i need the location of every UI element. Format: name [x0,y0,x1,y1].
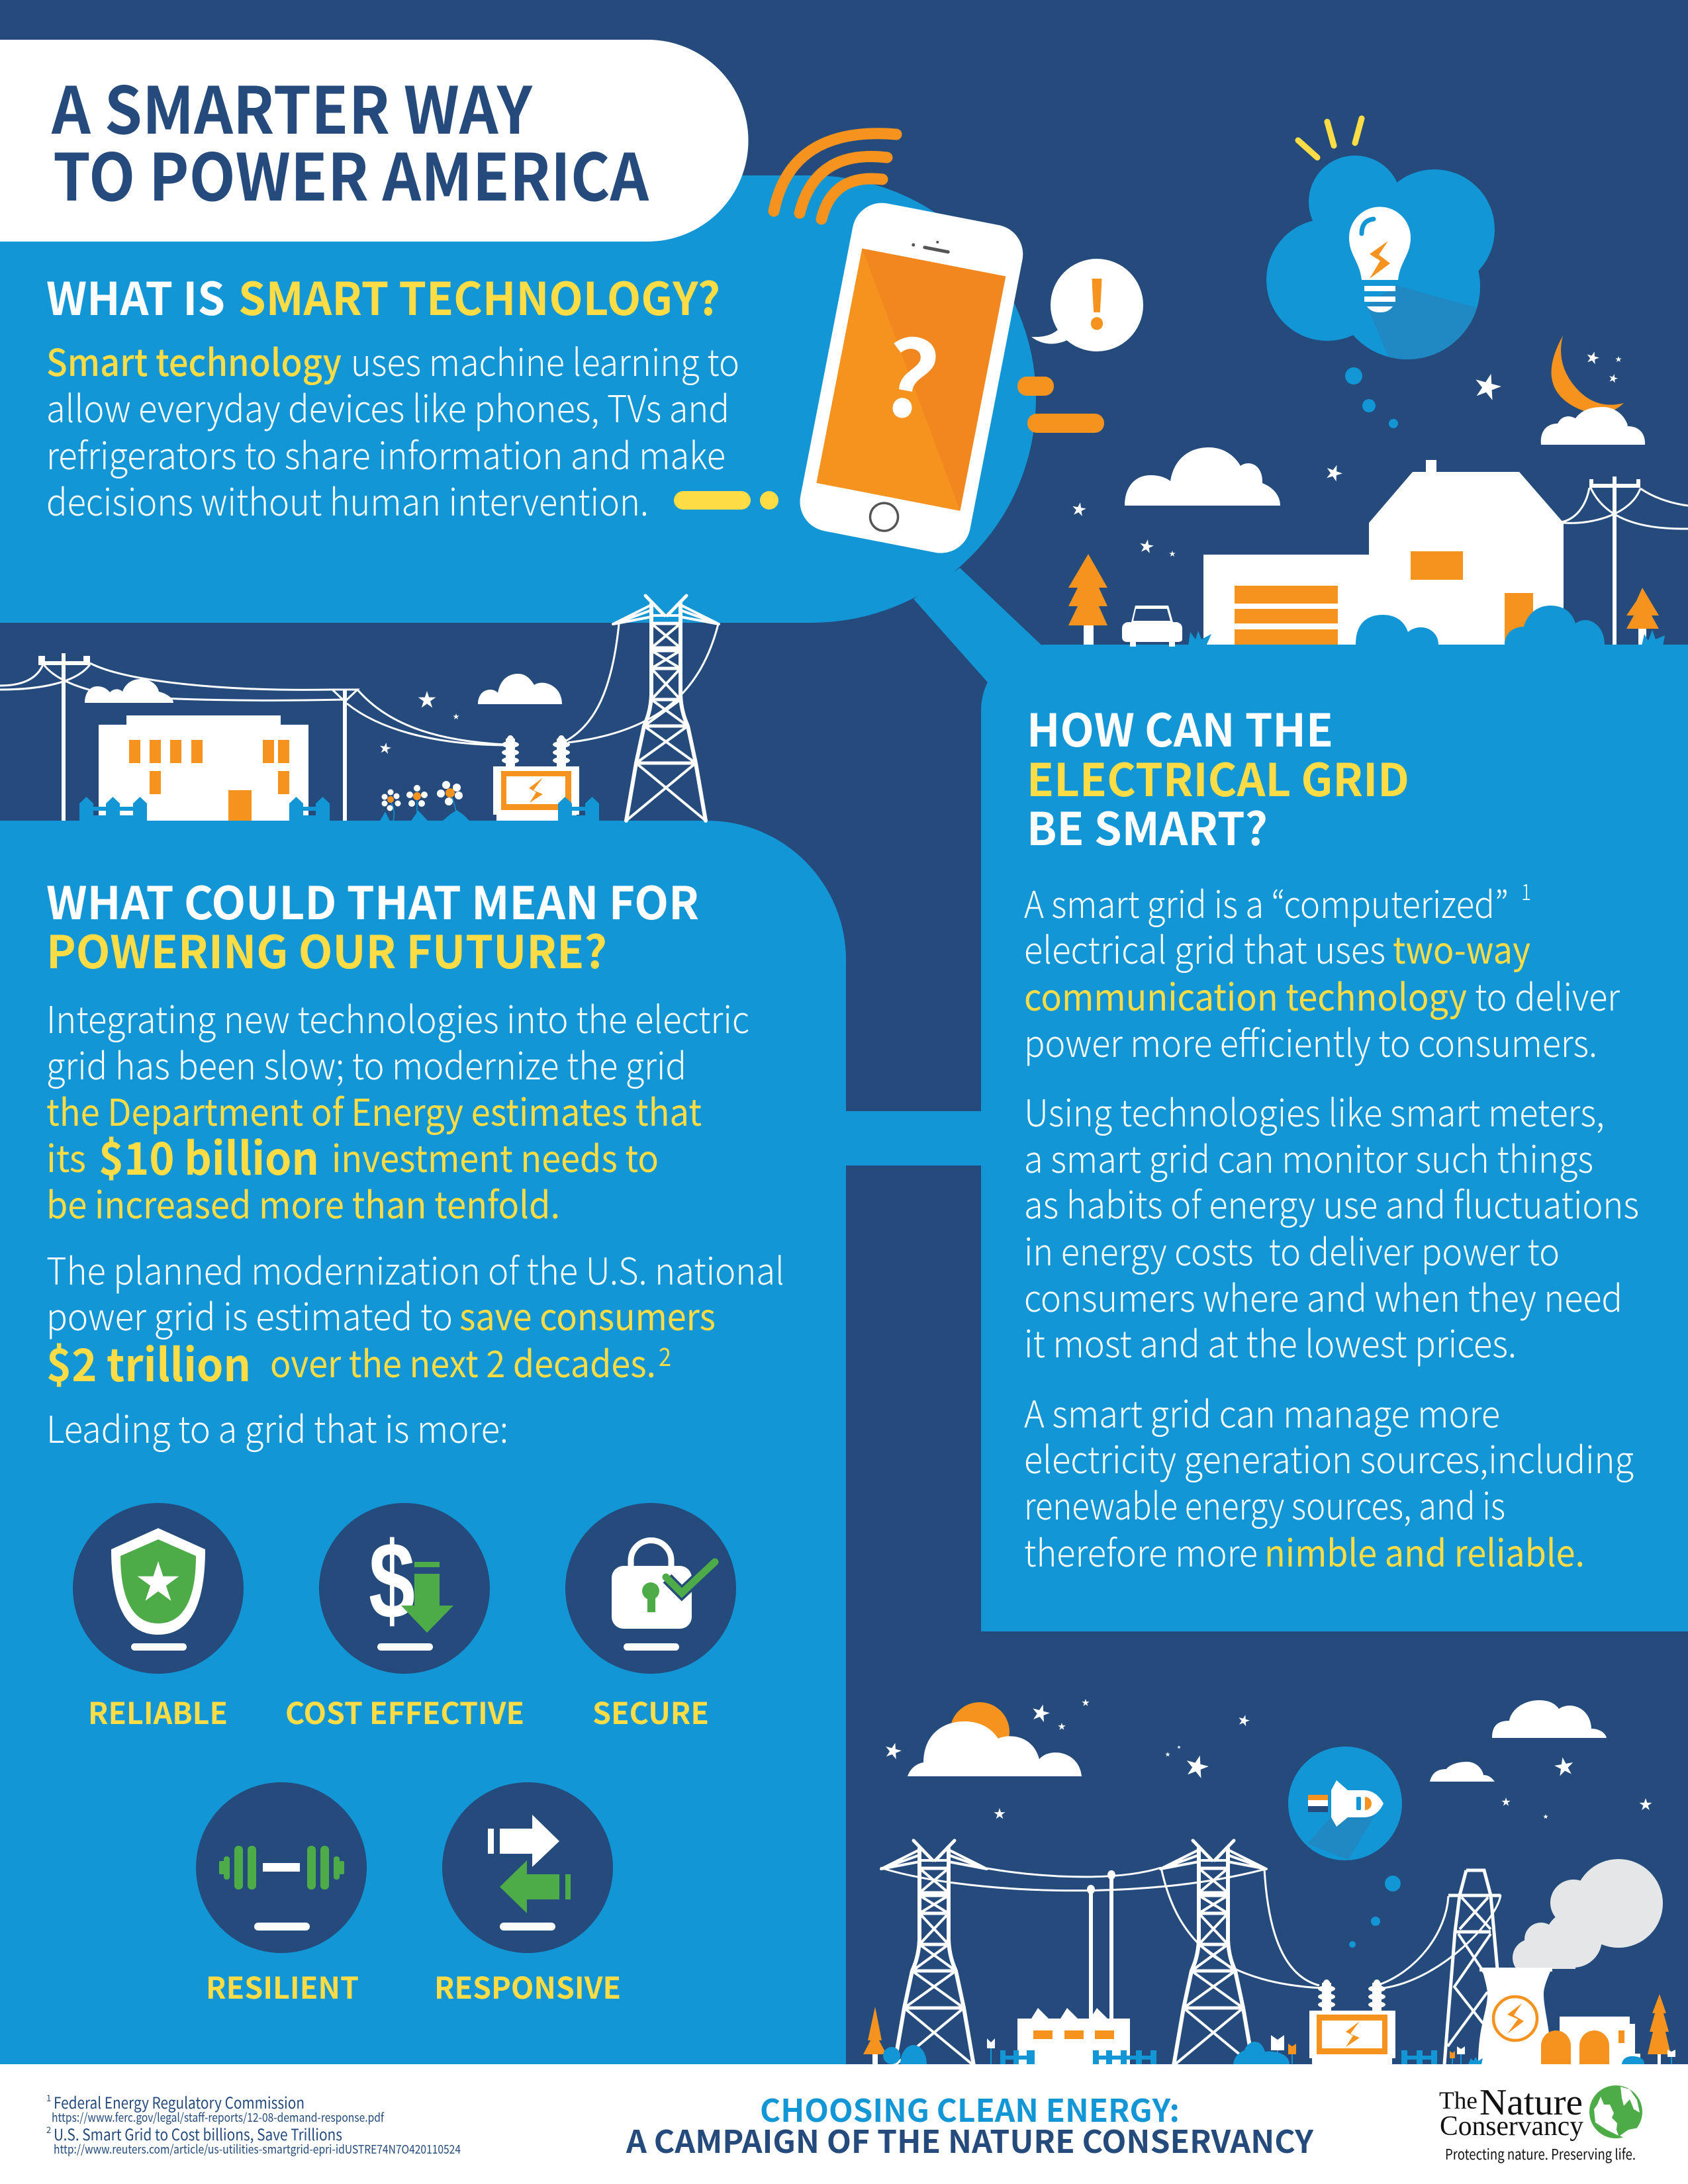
text block: monitoring: as habits of energy use and fluctuations [1024,1176,1639,1230]
smoke [1513,1859,1663,1976]
text block: smart technology definition: refrigerators to share information and make [46,427,726,480]
icon: exclamation speech bubble: ! [1084,252,1109,348]
tulips [987,2035,1675,2064]
text block: modernizing the grid: the Department of Energy estimates that [46,1083,702,1137]
text block: leading to: Leading to a grid that is more: [46,1400,508,1454]
text block: smart technology definition: uses machine learning to [351,334,739,387]
heading: what could that mean [46,867,699,981]
heading: what could that mean: POWERING OUR FUTURE? [46,916,607,981]
text block: nimble and reliable [1024,1385,1634,1578]
text block: nimble and reliable: electricity generation sources,including [1024,1431,1634,1484]
icon: idea cloud [1266,156,1496,371]
heading: how can the grid be smart [1027,694,1409,858]
cloud with sun [908,1721,1082,1776]
title: A SMARTER WAY [51,59,533,153]
cloud small [1430,1762,1495,1782]
icon group: resilient [196,1782,367,2007]
text block: consumer savings: 2 [659,1337,671,1373]
text block: monitoring [1024,1084,1639,1369]
text block: monitoring: Using technologies like smart meters, [1024,1084,1605,1138]
campaign tagline: A CAMPAIGN OF THE NATURE CONSERVANCY [626,2116,1314,2162]
text block: smart grid definition: 1 [1521,874,1531,907]
cloud: under moon [1541,407,1645,445]
title pill [0,40,748,242]
campaign tagline: CHOOSING CLEAN ENERGY: [760,2085,1180,2131]
scene: neighbourhood and transmission tower [0,596,719,821]
stars [883,1699,1652,1819]
text block: smart technology definition [46,334,739,527]
text block: modernizing the grid: grid has been slow; to modernize the grid [46,1037,686,1091]
connector: left panel to right panel [841,1111,986,1165]
text block: consumer savings: power grid is estimated to [46,1288,453,1342]
text block: smart grid definition: A smart grid is a “computerized” [1024,876,1509,929]
icon: smartphone: ? [870,293,952,451]
fences [1000,2050,1437,2064]
car [1122,606,1182,647]
cloud [85,679,173,703]
text block: consumer savings [46,1242,784,1394]
panel: what could that mean background [0,821,846,2064]
footnotes: 1 [46,2091,51,2104]
text block: smart grid definition: to deliver [1475,968,1620,1022]
logo: The Nature Conservancy: Conservancy [1440,2111,1583,2142]
utility pole left [38,653,90,821]
heading: what could that mean: WHAT COULD THAT MEAN FOR [46,867,699,933]
house [1203,460,1564,645]
footnotes: U.S. Smart Grid to Cost billions, Save Trillions [54,2122,342,2145]
title: TO POWER AMERICA [53,126,649,220]
cooling tower [1478,1968,1552,2064]
icon: sun [950,1702,1009,1762]
title [51,59,649,220]
heading: how can the grid be smart: BE SMART? [1027,793,1268,858]
icon group: cost effective: $ [369,1520,415,1641]
text block: smart technology definition: decisions without human intervention. [46,473,649,527]
heading: how can the grid be smart: ELECTRICAL GRID [1027,744,1409,809]
small tower [1444,1870,1501,2064]
trees [863,1994,1671,2064]
heading: how can the grid be smart: HOW CAN THE [1027,694,1333,760]
text block: smart grid definition: communication technology [1024,968,1467,1022]
text block: consumer savings: The planned modernization of the U.S. national [46,1242,784,1296]
grass [1188,630,1665,646]
text block: modernizing the grid: be increased more than tenfold. [46,1176,560,1230]
label: COST EFFECTIVE [285,1690,524,1733]
icon group: responsive [434,1782,621,2007]
icon group: reliable [73,1503,244,1733]
orange dashes [1017,377,1104,433]
footnotes: https://www.ferc.gov/legal/staff-reports/12-08-demand-response.pdf [52,2109,385,2126]
logo: The Nature Conservancy: Protecting nature. Preserving life. [1445,2143,1636,2164]
text block: modernizing the grid: investment needs to [332,1130,659,1183]
yellow rays [1298,118,1362,158]
transformer [493,735,599,821]
panel: what is smart technology background [0,175,1036,623]
footnotes [46,2090,461,2158]
text block: consumer savings: over the next 2 decades. [270,1335,656,1388]
label: RESPONSIVE [434,1964,621,2007]
plant building [1541,2017,1640,2064]
icon: crescent moon [1552,336,1624,413]
text block: modernizing the grid: its [46,1130,86,1183]
text block: monitoring: it most and at the lowest prices. [1024,1315,1517,1369]
heading: what is smart technology: SMART TECHNOLOGY? [238,263,720,328]
bushes [883,2042,1644,2083]
thought dots [1345,367,1398,428]
yellow dash and dot [674,491,778,510]
footnotes: http://www.reuters.com/article/us-utilities-smartgrid-epri-idUSTRE74N7O420110524 [54,2140,461,2158]
text block: monitoring: in energy costs to deliver power to [1024,1223,1560,1277]
cloud [478,674,562,704]
icon: wifi arcs [774,134,896,219]
transmission towers [881,1841,1266,2066]
footnotes: Federal Energy Regulatory Commission [54,2090,305,2113]
text block: nimble and reliable: A smart grid can manage more [1024,1385,1500,1439]
icon: rocket in circle [1288,1747,1402,1860]
flowers [381,781,469,821]
logo: The Nature Conservancy: Nature [1479,2082,1583,2123]
logo: The Nature Conservancy [1439,2082,1642,2164]
text block: smart technology definition: allow everyday devices like phones, TVs and [46,380,729,433]
fences [79,797,330,821]
text block: monitoring: consumers where and when they need [1024,1269,1622,1323]
label: RELIABLE [88,1690,228,1733]
label: RESILIENT [206,1964,359,2007]
text block: smart grid definition: electrical grid that uses [1024,921,1385,975]
trees: top scene [1068,554,1659,645]
text block: consumer savings: $2 trillion [46,1329,251,1394]
connector: top panel to grid panel [914,568,1059,688]
text block: modernizing the grid [46,991,749,1230]
power lines [880,1868,1501,1988]
label: SECURE [592,1690,709,1733]
text block: nimble and reliable: therefore more [1024,1524,1258,1578]
scene: power plant and grid [863,1699,1675,2083]
utility pole with wires [1561,477,1688,645]
text block: consumer savings: save consumers [459,1288,716,1342]
icon: exclamation speech bubble [1031,252,1143,351]
panel: how can the grid be smart background [981,645,1688,1631]
small poles [1087,1870,1115,2019]
campaign tagline [626,2085,1314,2162]
cloud: top centre [1125,447,1280,506]
icon: light bulb [1349,206,1411,312]
power lines [0,624,718,745]
stars [379,691,459,754]
cloud right [1492,1700,1607,1738]
building [99,715,308,821]
heading: what is smart technology: WHAT IS [46,263,225,328]
stars: top scene [1071,350,1622,557]
footnotes: 2 [46,2123,51,2136]
bushes [1356,606,1605,645]
text block: smart grid definition: power more efficiently to consumers. [1024,1015,1597,1068]
text block: modernizing the grid: $10 billion [99,1122,319,1188]
text block: nimble and reliable: renewable energy sources, and is [1024,1477,1505,1531]
text block: modernizing the grid: Integrating new technologies into the electric [46,991,749,1044]
text block: monitoring: a smart grid can monitor such things [1024,1130,1593,1184]
factory [1017,2008,1130,2064]
icon group: cost effective [285,1503,524,1733]
icon: smartphone [795,198,1028,558]
text block: smart grid definition: two-way [1393,921,1530,975]
icon group: secure [565,1503,736,1733]
text block: nimble and reliable: nimble and reliable. [1264,1524,1585,1578]
text block: smart grid definition [1024,874,1620,1068]
dots under rocket [1349,1876,1401,1948]
utility pole centre [332,690,357,821]
logo: The Nature Conservancy: The [1439,2087,1477,2115]
text block: smart technology definition: Smart technology [46,334,342,387]
footer [0,2064,1688,2184]
transmission tower [613,596,719,821]
transformer [1309,1979,1395,2064]
